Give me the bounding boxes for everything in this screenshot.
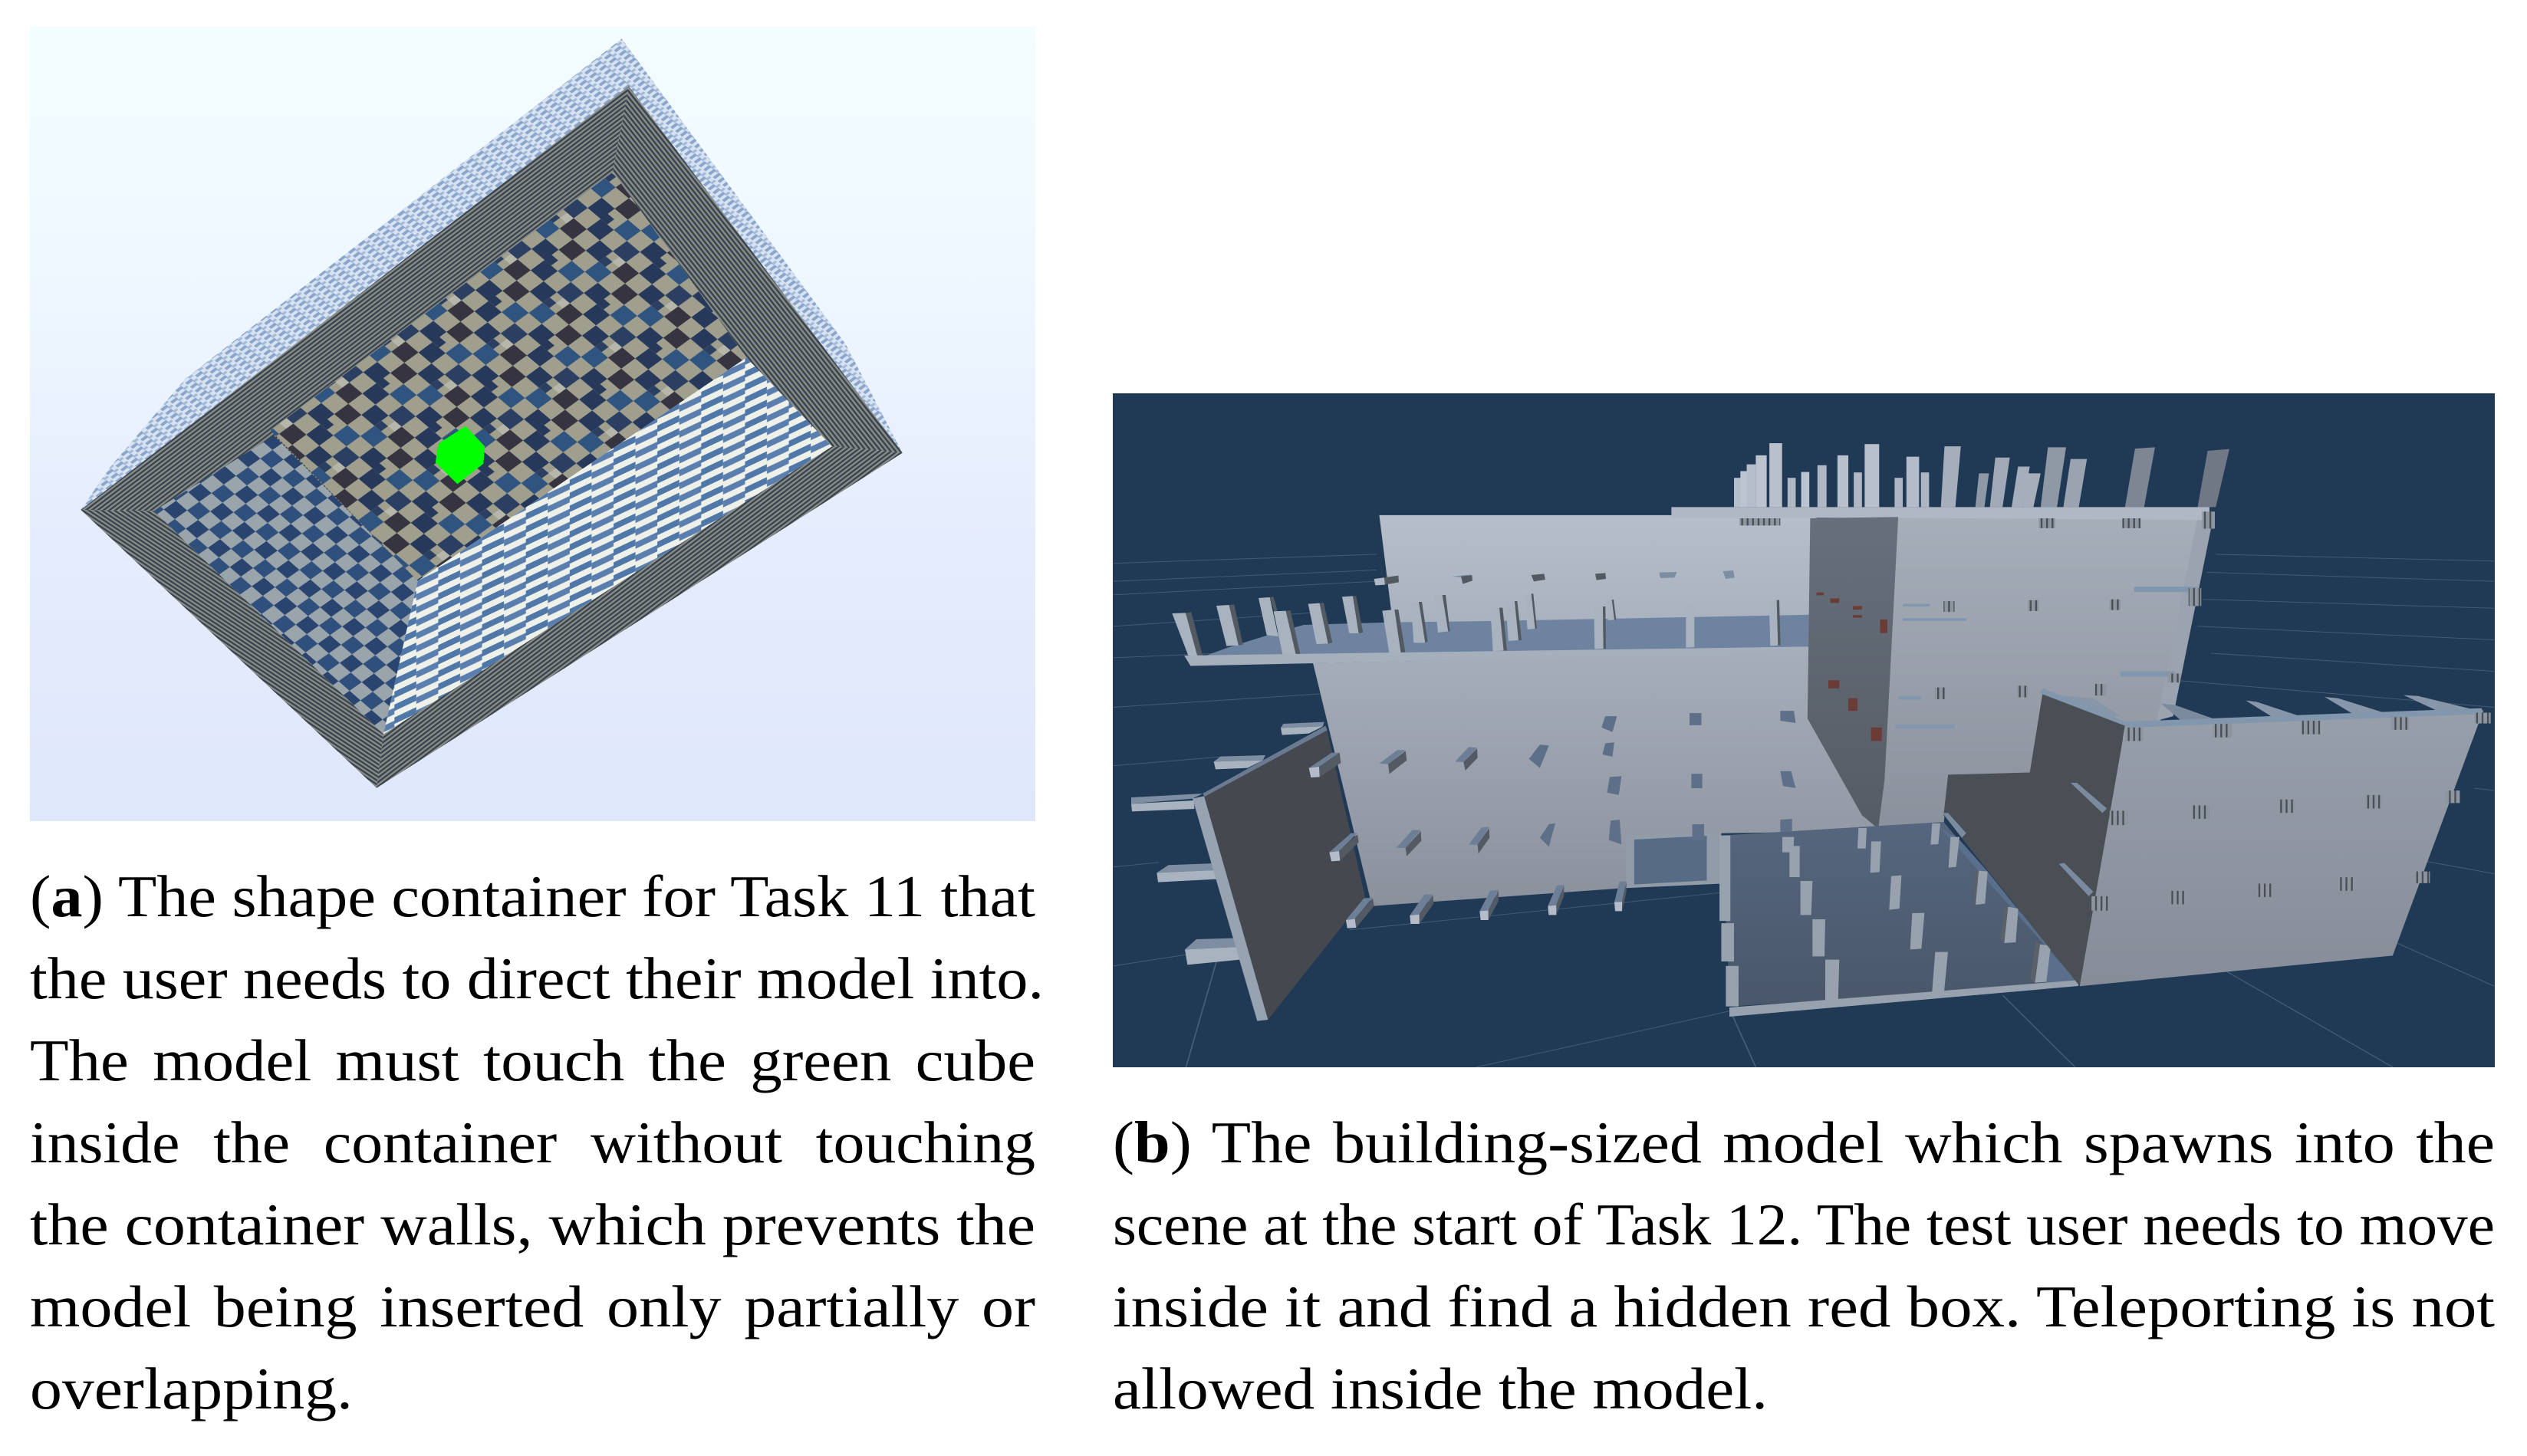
panel a: shape container screenshot xyxy=(30,27,1035,821)
caption a xyxy=(30,863,1044,1421)
wall ledges xyxy=(1896,587,2198,728)
caption a: inside the container without touching xyxy=(30,1109,1035,1175)
stubs crossing dark wall xyxy=(1309,753,1359,861)
outward stubs xyxy=(1131,722,1324,965)
wall block stubs xyxy=(1379,747,1489,856)
lower left dark wall xyxy=(1204,730,1365,1020)
floor left column fins xyxy=(1719,836,1739,1007)
caption a: model being inserted only partially or xyxy=(30,1274,1035,1339)
container outer right face xyxy=(622,39,903,453)
caption a: the container walls, which prevents the xyxy=(30,1191,1035,1257)
window glass xyxy=(1634,836,1707,885)
ground grid xyxy=(1114,554,2494,1067)
caption b: (b) The building-sized model which spawns into the xyxy=(1113,1109,2495,1175)
blue strip beside dark wall xyxy=(1940,828,2078,983)
bottom stubs xyxy=(1346,881,1627,928)
balcony floor xyxy=(1203,615,1815,657)
upper structures xyxy=(1114,443,2494,1067)
caption b: inside it and find a hidden red box. Teleporting is not xyxy=(1113,1274,2495,1339)
sky background xyxy=(30,27,1035,821)
centre and right wall stubs xyxy=(1529,711,1795,846)
container lower left frame xyxy=(81,510,383,788)
dark wall ledges xyxy=(1943,783,2107,896)
container left wall xyxy=(154,435,418,735)
container right frame xyxy=(613,86,903,453)
right upper wall xyxy=(1878,517,2213,831)
caption a: the user needs to direct their model into. xyxy=(30,945,1044,1011)
roof slab xyxy=(1671,507,2209,520)
back wall stubs xyxy=(1374,570,1735,585)
dark blue background xyxy=(1113,393,2495,1067)
floor fin shadows xyxy=(1973,871,2040,983)
shape container xyxy=(81,39,903,788)
bolt hatch clusters xyxy=(1739,511,2491,911)
caption a: overlapping. xyxy=(30,1356,353,1421)
right wall top edge xyxy=(2039,689,2483,728)
lower left wall with stubs xyxy=(1131,722,1627,1021)
container bottom wall xyxy=(383,357,832,735)
floor fins xyxy=(1782,823,2051,1001)
caption b: allowed inside the model. xyxy=(1113,1356,1768,1421)
lower left wall edge xyxy=(1193,796,1268,1021)
right front wall xyxy=(2080,711,2483,986)
balcony xyxy=(1172,593,1815,657)
caption b: scene at the start of Task 12. The test user needs to move xyxy=(1113,1191,2495,1257)
main lower wall xyxy=(1313,652,1878,906)
container lower right frame xyxy=(377,446,903,788)
caption a: (a) The shape container for Task 11 that xyxy=(30,863,1035,929)
panel b: building-sized model screenshot xyxy=(1113,393,2495,1067)
balcony fins xyxy=(1172,593,1781,657)
container top frame xyxy=(81,86,629,581)
recessed floor and rear fins xyxy=(1719,695,2479,1007)
red hatch marks on central fin xyxy=(1817,593,1887,741)
container back wall xyxy=(271,172,746,581)
floor fins and front edge xyxy=(1729,823,2078,1017)
container outer top face xyxy=(81,39,630,510)
caption a: The model must touch the green cube xyxy=(30,1027,1035,1093)
main walls xyxy=(1184,646,1878,906)
caption b xyxy=(1113,1109,2495,1421)
right wall pale edge xyxy=(2157,518,2213,721)
green target cube xyxy=(436,426,485,484)
floor front edge xyxy=(1729,980,2078,1017)
lower left wall top edge xyxy=(1203,726,1328,797)
right side rear fins xyxy=(2061,695,2479,723)
back upper wall xyxy=(1379,515,1817,653)
roof fins xyxy=(1734,443,2229,507)
central dark wall fin xyxy=(1529,517,2198,846)
lower left window opening xyxy=(1626,833,1721,888)
right dark wall xyxy=(1943,689,2125,986)
recessed floor xyxy=(1721,822,2080,1007)
balcony front slab xyxy=(1184,646,1817,666)
building model xyxy=(1114,443,2494,1067)
right walls xyxy=(1739,511,2491,986)
